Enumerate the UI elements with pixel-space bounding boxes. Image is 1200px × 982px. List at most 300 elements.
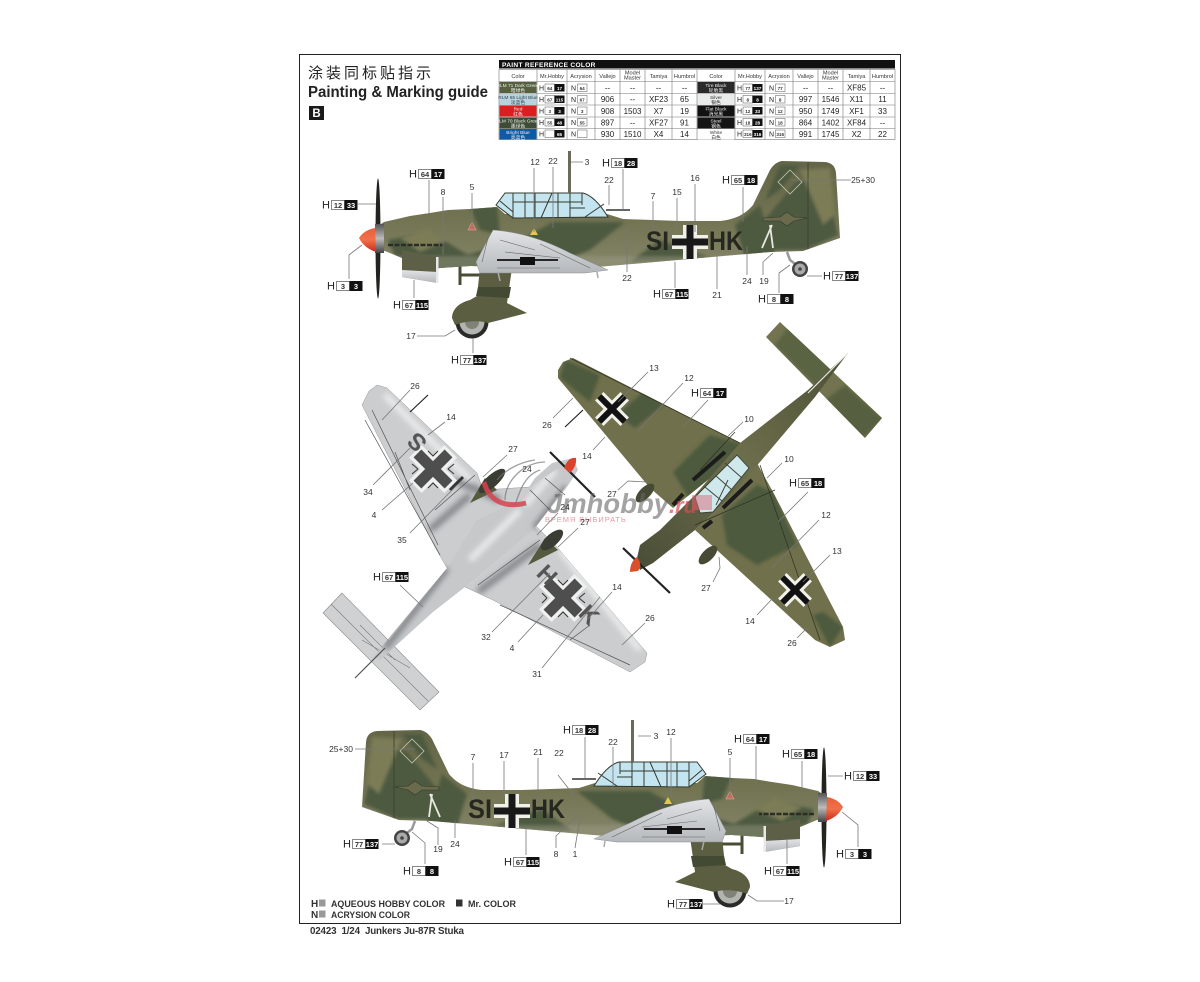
- Mr.Hobby and Acrysion codes: 3: [581, 109, 584, 114]
- propeller: [376, 178, 380, 298]
- watermark domain: .ru: [669, 493, 698, 518]
- callouts: top profile numbers: 7: [651, 191, 656, 201]
- starboard wing: [695, 463, 845, 647]
- paint callout H 12 33: 33: [347, 201, 355, 210]
- Mr.Hobby and Acrysion codes: N: [571, 86, 576, 92]
- Mr.Hobby and Acrysion codes: N: [769, 108, 774, 116]
- red watermark tint over canopy: [692, 495, 712, 510]
- callouts: bottom profile numbers: 21: [533, 747, 543, 757]
- table values: 1546: [822, 95, 840, 104]
- wing bar I: [450, 477, 463, 490]
- table column headers: Humbrol: [872, 74, 893, 80]
- callouts: top profile numbers: 15: [672, 187, 682, 197]
- callouts: top view numbers: 13: [649, 363, 659, 373]
- callouts: bottom profile numbers: 3: [654, 731, 659, 741]
- table values: XF84: [847, 118, 867, 128]
- paint callout H 67 115: H: [393, 300, 401, 312]
- callouts: bottom profile numbers: 7: [471, 752, 476, 762]
- paint callout H 64 17: 64: [746, 735, 755, 744]
- Mr.Hobby and Acrysion codes: 12: [778, 109, 783, 114]
- starboard wing cross: [528, 563, 598, 633]
- Mr.Hobby and Acrysion codes: H: [737, 86, 742, 92]
- Mr.Hobby and Acrysion codes: N: [571, 132, 576, 138]
- paint callout H 67 115: 67: [385, 573, 393, 582]
- paint callout H 67 115: [393, 300, 428, 312]
- paint callout H 65 18: 18: [814, 479, 822, 488]
- Mr.Hobby and Acrysion codes: H: [737, 120, 742, 127]
- colour swatches: RLM 65 Light Blue: [498, 95, 538, 101]
- table values: 19: [680, 107, 689, 116]
- table column headers: Mr.Hobby: [738, 74, 762, 80]
- camouflage pattern: [375, 162, 845, 272]
- canopy: [496, 151, 630, 218]
- paint callout H 64 17: H: [734, 734, 742, 746]
- port wing: [362, 385, 537, 587]
- paint callout H 3 3: 3: [850, 850, 854, 859]
- Mr.Hobby and Acrysion codes: 316: [744, 132, 752, 137]
- table values: XF27: [649, 118, 669, 128]
- tailplane detail lines: [331, 604, 428, 701]
- callouts: bottom profile numbers: 25+30: [329, 744, 353, 754]
- callouts: top view numbers: 14: [745, 616, 755, 626]
- legend row: aqueous hobby color: H: [311, 899, 318, 910]
- paint callout H 3 3: H: [327, 280, 335, 292]
- Mr.Hobby and Acrysion codes: N: [571, 97, 576, 104]
- Mr.Hobby and Acrysion codes: N: [769, 97, 774, 104]
- table values: 65: [680, 95, 689, 104]
- colour swatches: Flat Black: [705, 106, 727, 112]
- Mr.Hobby and Acrysion codes: 64: [547, 86, 553, 91]
- callouts: bottom profile numbers: 5: [728, 747, 733, 757]
- table values: --: [880, 84, 886, 92]
- table column headers: Vallejo: [797, 74, 814, 80]
- table grid: [499, 70, 895, 140]
- colour swatches: [496, 82, 734, 141]
- paint callout H 64 17: 17: [716, 389, 724, 398]
- table values: 991: [799, 130, 813, 139]
- callouts: top profile numbers: 21: [712, 290, 722, 300]
- paint callout H 67 115: [653, 288, 688, 300]
- table values: 33: [878, 107, 887, 116]
- watermark slogan: ВРЕМЯ ВЫБИРАТЬ: [545, 515, 627, 524]
- table values: XF1: [849, 107, 864, 116]
- paint callout H 77 137: H: [451, 354, 459, 366]
- colour swatches: White: [710, 130, 722, 136]
- Mr.Hobby and Acrysion codes: 48: [557, 120, 562, 125]
- paint callout H 3 3: 3: [341, 282, 345, 291]
- paint callout H 64 17: H: [409, 168, 417, 180]
- port wing: [558, 358, 745, 508]
- wing letter K: K: [573, 600, 605, 631]
- balkenkreuz: [672, 225, 708, 259]
- shading on wings and fuselage: [385, 395, 640, 650]
- callouts: top view numbers: 12: [684, 373, 694, 383]
- paint callout H 8 8: [758, 294, 794, 306]
- table column headers: Color: [511, 74, 525, 80]
- paint callout H 77 137: H: [823, 270, 831, 282]
- Mr.Hobby and Acrysion codes: 8: [779, 97, 782, 102]
- table column headers: Color: [709, 74, 723, 80]
- paint callout H 67 115: 115: [396, 573, 408, 582]
- table values: 1745: [822, 130, 840, 139]
- port gear spat: [470, 465, 509, 503]
- callouts: bottom profile numbers: 24: [450, 839, 460, 849]
- table values: --: [630, 118, 636, 128]
- watermark name: Jmhobby: [547, 488, 670, 519]
- colour swatches: Bright Blue: [506, 130, 530, 136]
- colour swatches: 墨绿色: [511, 122, 525, 130]
- Mr.Hobby and Acrysion codes: 8: [747, 97, 750, 102]
- paint callout H 18 28: 28: [588, 726, 596, 735]
- callouts: bottom profile numbers: 19: [433, 844, 443, 854]
- wing panel lines: [365, 410, 630, 665]
- Mr.Hobby and Acrysion codes: N: [769, 132, 774, 138]
- paint callout H 8 8: 8: [785, 295, 789, 304]
- colour swatches: Tire Black: [705, 83, 727, 89]
- Mr.Hobby and Acrysion codes: 67: [580, 97, 585, 102]
- table values: --: [605, 84, 610, 92]
- paint callout H 64 17: [691, 388, 726, 400]
- Mr.Hobby and Acrysion codes: 33: [755, 109, 760, 114]
- paint callout H 77 137: 137: [690, 900, 702, 909]
- table values: --: [803, 84, 808, 92]
- table column headers: Humbrol: [674, 74, 695, 80]
- paint callout H 65 18: [789, 478, 824, 490]
- paint reference table: [496, 60, 895, 141]
- Mr.Hobby and Acrysion codes: 3: [549, 109, 552, 114]
- paint callout H 64 17: 64: [703, 389, 712, 398]
- paint callout H 77 137: 77: [355, 840, 363, 849]
- colour swatches: Silver: [710, 95, 722, 101]
- wing silver underside: [476, 230, 608, 281]
- paint callout H 64 17: 17: [759, 735, 767, 744]
- aircraft: left side profile: [359, 151, 845, 338]
- paint callout H 3 3: 3: [863, 850, 867, 859]
- fin diamond outline: [778, 170, 802, 194]
- paint callout H 77 137: [343, 838, 378, 850]
- paint callout H 18 28: H: [563, 724, 571, 736]
- fuselage: [373, 458, 578, 660]
- aircraft: top view (camouflage): [558, 322, 885, 647]
- paint callout H 12 33: 12: [856, 772, 864, 781]
- wing letter H: H: [531, 560, 562, 591]
- paint callout H 3 3: [836, 848, 872, 860]
- paint callout H 77 137: 77: [835, 272, 843, 281]
- Mr.Hobby and Acrysion codes: 316: [776, 132, 784, 137]
- colour swatches: 轮胎黑: [709, 87, 723, 94]
- paint callout H 8 8: 8: [430, 867, 434, 876]
- colour swatches: 亮蓝色: [511, 134, 525, 141]
- callouts: underside view numbers: 14: [612, 582, 622, 592]
- callouts: underside view numbers: 14: [446, 412, 456, 422]
- fuselage letters HK: HK: [709, 226, 743, 256]
- table heading bar: PAINT REFERENCE COLOR: [502, 62, 596, 69]
- Mr.Hobby and Acrysion codes: 17: [557, 86, 562, 91]
- callouts: top profile numbers: [406, 156, 875, 341]
- starboard wing cross: [770, 565, 820, 615]
- callouts: top profile numbers: 22: [622, 273, 632, 283]
- table values: [601, 84, 887, 139]
- scheme badge B: [309, 106, 324, 120]
- Mr.Hobby and Acrysion codes: 316: [754, 132, 762, 137]
- Mr.Hobby and Acrysion codes: 55: [547, 120, 553, 125]
- Mr.Hobby and Acrysion codes: 64: [580, 86, 585, 91]
- title: Chinese: 涂装同标贴指示: [308, 65, 434, 82]
- port wing camouflage: [560, 360, 745, 500]
- paint callout H 77 137: H: [343, 838, 351, 850]
- paint callout H 18 28: 28: [627, 159, 635, 168]
- table heading bar: [499, 60, 895, 69]
- pitot tube: [410, 395, 428, 412]
- colour swatches: 白色: [711, 134, 721, 141]
- Mr.Hobby and Acrysion codes: H: [539, 132, 544, 138]
- table values: 91: [680, 118, 689, 128]
- table values: XF85: [847, 84, 867, 92]
- Mr.Hobby and Acrysion codes: 8: [756, 97, 759, 102]
- table values: 1402: [822, 118, 840, 128]
- callouts: underside view numbers: 4: [510, 643, 515, 653]
- paint callout H 77 137: 77: [463, 356, 471, 365]
- callouts: underside view numbers: 26: [645, 613, 655, 623]
- callouts: bottom profile numbers: 1: [573, 849, 578, 859]
- tail spike: [808, 353, 848, 393]
- scheme badge B: B: [312, 108, 321, 120]
- colour swatches: 淡蓝色: [511, 99, 525, 106]
- tailplane: [323, 593, 439, 710]
- codes on top profile: [646, 225, 743, 259]
- paint callout H 18 28: [563, 724, 598, 736]
- table values: 1503: [624, 107, 642, 116]
- paint callout H 64 17: H: [691, 388, 699, 400]
- exhaust row: [388, 244, 443, 246]
- fuselage letters SI: SI: [468, 794, 492, 824]
- colour swatches: 消光黑: [709, 110, 723, 118]
- paint callout H 67 115: H: [504, 856, 512, 868]
- callouts: bottom profile numbers: 12: [666, 727, 676, 737]
- starboard gear spat: [696, 543, 720, 567]
- Mr.Hobby and Acrysion codes: 115: [556, 97, 564, 102]
- fuselage letters SI: SI: [646, 226, 669, 256]
- port gear spat: [633, 481, 657, 505]
- colour swatches: Red: [514, 106, 523, 112]
- Mr.Hobby and Acrysion codes: 12: [745, 109, 751, 114]
- paint callout H 67 115: H: [653, 288, 661, 300]
- paint callout H 65 18: [782, 748, 818, 760]
- paint callout H 67 115: 67: [516, 858, 524, 867]
- callouts: top profile numbers: 17: [406, 331, 416, 341]
- paint callout H 67 115: 67: [405, 301, 413, 310]
- paint callout H 18 28: 18: [614, 159, 622, 168]
- Mr.Hobby and Acrysion codes: N: [571, 108, 576, 116]
- table values: --: [656, 84, 662, 92]
- callouts: bottom profile numbers: 22: [554, 748, 564, 758]
- propeller: [550, 452, 595, 497]
- paint callout H 64 17: [409, 168, 444, 180]
- paint callout H 8 8: 8: [772, 295, 776, 304]
- paint callout H 18 28: H: [602, 158, 610, 170]
- table column headers: [511, 70, 893, 82]
- paint callout H 77 137: [451, 354, 486, 366]
- callouts: underside view numbers: 32: [481, 632, 491, 642]
- paint callout H 67 115: 115: [676, 290, 688, 299]
- paint callout H 8 8: 8: [417, 867, 421, 876]
- title block: [308, 65, 488, 120]
- red spinner: [564, 458, 576, 473]
- wing letter S: S: [402, 426, 433, 457]
- footer caption: 02423 1/24 Junkers Ju-87R Stuka: [310, 926, 465, 937]
- paint callout H 65 18: [722, 174, 758, 186]
- tail wheel: [787, 252, 808, 277]
- callouts: top view numbers: 10: [744, 414, 754, 424]
- legend row: acrysion color: N: [311, 910, 318, 921]
- port wing cross: [398, 434, 468, 504]
- paint callout H 65 18: 18: [747, 176, 755, 185]
- table values: --: [828, 84, 834, 92]
- paint callout H 67 115: [764, 866, 800, 878]
- legend row: aqueous hobby color: AQUEOUS HOBBY COLOR: [331, 899, 445, 910]
- table column headers: Vallejo: [599, 74, 616, 80]
- callouts: top profile numbers: 3: [585, 157, 590, 167]
- callouts: top view numbers: 13: [832, 546, 842, 556]
- callouts: bottom profile numbers: [329, 727, 794, 906]
- paint callout H 65 18: H: [722, 174, 730, 186]
- tailplane: [766, 322, 882, 438]
- table values: 1749: [822, 107, 840, 116]
- Mr.Hobby and Acrysion codes: H: [539, 97, 544, 104]
- paint callout H 67 115: 67: [665, 290, 673, 299]
- aircraft: right side profile: [357, 720, 843, 908]
- propeller: [623, 548, 670, 593]
- paint callout H 67 115: 115: [416, 301, 428, 310]
- paint callout H 65 18: 65: [794, 750, 802, 759]
- balkenkreuz: [494, 794, 530, 828]
- callouts: underside view numbers: 35: [397, 535, 407, 545]
- callouts: underside view numbers: 34: [363, 487, 373, 497]
- callouts: top profile numbers: 19: [759, 276, 769, 286]
- paint callout H 64 17: 17: [434, 170, 442, 179]
- table values: X2: [852, 130, 862, 139]
- paint callout H 65 18: 65: [801, 479, 809, 488]
- callouts: top profile numbers: 22: [604, 175, 614, 185]
- paint callout H 65 18: 18: [807, 750, 815, 759]
- paint callout H 77 137: 137: [474, 356, 486, 365]
- callouts: bottom profile numbers: 22: [608, 737, 618, 747]
- paint callout H 77 137: 137: [846, 272, 858, 281]
- table values: --: [682, 84, 688, 92]
- codes on bottom profile: [468, 794, 565, 828]
- callouts: top profile numbers: 16: [690, 173, 700, 183]
- watermark logo outline: [497, 460, 545, 505]
- Mr.Hobby and Acrysion codes: 18: [745, 120, 751, 125]
- propeller hub: [375, 224, 384, 253]
- table values: 864: [799, 118, 813, 128]
- starboard gear spat: [528, 526, 566, 565]
- table values: 22: [878, 130, 887, 139]
- port wing cross: [587, 384, 637, 434]
- table column headers: Tamiya: [650, 74, 668, 80]
- colour swatches: RLM 71 Dark Green: [497, 83, 540, 89]
- leader lines: [349, 162, 858, 904]
- callouts: top profile numbers: 5: [470, 182, 475, 192]
- table values: 1510: [624, 130, 642, 139]
- table column headers: Model: [625, 70, 640, 76]
- paint callout H 18 28: [602, 158, 638, 170]
- colour swatches: 银色: [711, 99, 721, 106]
- paint callout H 65 18: 65: [734, 176, 742, 185]
- callouts: top profile numbers: 12: [530, 157, 540, 167]
- fuselage: [637, 353, 848, 570]
- table values: 897: [601, 118, 615, 128]
- Mr.Hobby and Acrysion codes: 77: [778, 86, 783, 91]
- red spinner: [630, 557, 640, 572]
- callouts: top view numbers: 27: [701, 583, 711, 593]
- paint callout H 67 115: H: [373, 572, 381, 584]
- callouts: top view numbers: 26: [787, 638, 797, 648]
- colour swatches: Steel: [711, 118, 721, 124]
- radiator: [402, 250, 438, 283]
- callouts: underside view numbers: 27: [508, 444, 518, 454]
- table column headers: Master: [624, 76, 641, 82]
- fuselage body: [375, 161, 840, 270]
- callouts: top profile numbers: 22: [548, 156, 558, 166]
- table values: 950: [799, 107, 813, 116]
- Mr.Hobby and Acrysion codes: 55: [580, 120, 585, 125]
- fuselage letters HK: HK: [531, 794, 565, 824]
- paint callout H 12 33: H: [844, 770, 852, 782]
- main landing gear: [452, 266, 527, 338]
- paint callout H 67 115: 67: [776, 867, 784, 876]
- callouts: top view numbers: 12: [821, 510, 831, 520]
- Mr.Hobby and Acrysion codes: 77: [745, 86, 751, 91]
- paint callout H 12 33: [322, 200, 358, 212]
- Mr.Hobby and Acrysion codes: N: [769, 86, 774, 92]
- paint callout H 12 33: 12: [334, 201, 342, 210]
- table values: X7: [654, 107, 664, 116]
- table values: X4: [654, 130, 664, 139]
- Mr.Hobby and Acrysion codes: 137: [754, 86, 762, 91]
- table values: 908: [601, 107, 615, 116]
- paint callout H 67 115: [373, 572, 408, 584]
- Mr.Hobby and Acrysion codes: H: [737, 108, 742, 116]
- table values: X11: [850, 95, 864, 104]
- legend: [311, 899, 516, 921]
- red spinner: [359, 228, 376, 252]
- paint callout H 12 33: H: [322, 200, 330, 212]
- callouts: top view numbers: [542, 363, 842, 648]
- Mr.Hobby and Acrysion codes: N: [769, 120, 774, 127]
- callouts: underside view numbers: 26: [410, 381, 420, 391]
- paint callout H 3 3: H: [836, 848, 844, 860]
- callouts: underside view numbers: 24: [522, 464, 532, 474]
- table column headers: Tamiya: [848, 74, 866, 80]
- callouts: top view numbers: 26: [542, 420, 552, 430]
- colour swatches: 暗绿色: [511, 87, 525, 94]
- paint callout H 65 18: H: [782, 748, 790, 760]
- paint callout H 77 137: [667, 898, 702, 910]
- callouts: underside view numbers: 31: [532, 669, 542, 679]
- Mr.Hobby and Acrysion codes: H: [737, 132, 742, 138]
- warning triangles: [468, 222, 538, 235]
- Mr.Hobby and Acrysion codes: 28: [755, 120, 760, 125]
- page frame: [300, 54, 900, 924]
- pitot tube: [565, 410, 583, 427]
- black wing panels: [673, 452, 752, 528]
- callouts: underside view numbers: 4: [372, 510, 377, 520]
- aileron lines: [570, 358, 820, 640]
- paint callout H 12 33: 33: [869, 772, 877, 781]
- paint callout H 18 28: 18: [575, 726, 583, 735]
- Mr.Hobby and Acrysion codes: 67: [547, 97, 553, 102]
